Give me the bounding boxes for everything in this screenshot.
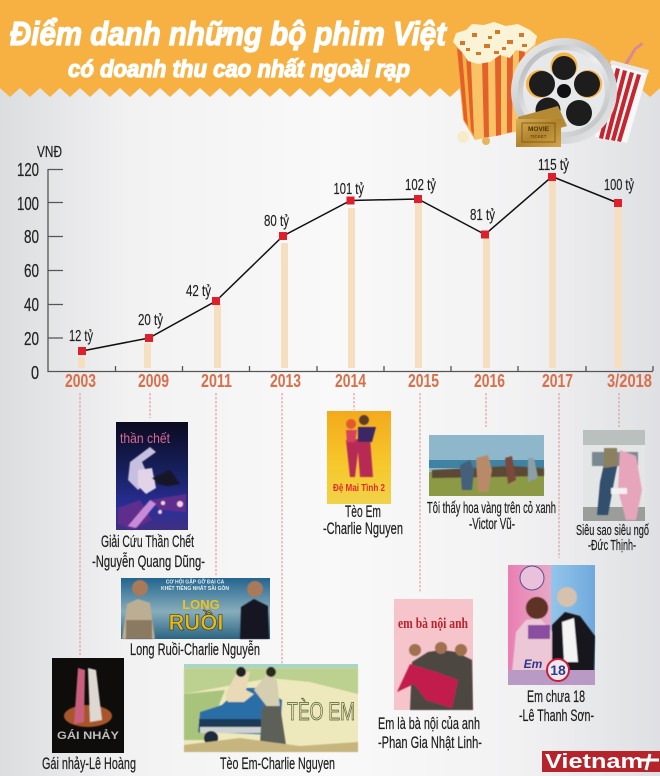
year labels xyxy=(65,371,652,391)
trend line xyxy=(82,176,618,351)
value labels: 102 tỷ xyxy=(405,177,436,194)
value labels xyxy=(69,157,634,345)
caption: Em là bà nội của anh xyxy=(378,715,482,752)
poster: Đệ Mai Tình: Đệ Mai Tình 2 xyxy=(333,483,385,494)
value labels: 81 tỷ xyxy=(470,207,495,224)
poster: Long Ruồi: RUỒI xyxy=(168,610,224,635)
y axis labels: 20 xyxy=(24,329,39,349)
year labels: 2016 xyxy=(474,371,505,391)
year labels: 2015 xyxy=(408,371,439,391)
poster: Tèo Em wide xyxy=(184,664,358,752)
year labels: 2003 xyxy=(65,371,96,391)
icon: film reel xyxy=(511,38,617,144)
y axis labels: 80 xyxy=(24,227,39,247)
y axis labels xyxy=(17,160,39,383)
header banner with zigzag edge xyxy=(0,0,660,97)
poster: Em chưa 18: Em xyxy=(524,657,543,671)
title: Điểm danh những bộ phim Việt xyxy=(10,15,448,52)
year labels: 2017 xyxy=(542,371,573,391)
poster: Long Ruồi: LONG xyxy=(182,597,220,612)
caption: Tèo Em: Tèo Em xyxy=(345,503,381,521)
caption: Em chưa 18: Em chưa 18 xyxy=(527,688,585,706)
poster: Long Ruồi: CƠ HỘI GẶP GỠ ĐẠI CA xyxy=(166,578,225,586)
y axis labels: 100 xyxy=(17,194,39,214)
poster: Em là bà nội của anh xyxy=(394,599,473,710)
axis unit label: VNĐ xyxy=(37,144,62,161)
caption: Em là bà nội của anh: Em là bà nội của anh xyxy=(378,715,480,733)
caption: Tôi thấy hoa vàng trên cỏ xanh: -Victor Vũ- xyxy=(469,516,515,533)
caption: Tèo Em xyxy=(323,503,403,538)
title xyxy=(10,15,448,83)
icon: drink cup xyxy=(595,42,649,143)
caption: Em là bà nội của anh: -Phan Gia Nhật Linh- xyxy=(378,734,482,752)
value labels: 100 tỷ xyxy=(604,177,634,194)
value labels: 101 tỷ xyxy=(334,181,364,198)
data points xyxy=(78,173,622,355)
caption: Long Ruồi: Long Ruồi-Charlie Nguyễn xyxy=(130,640,260,659)
caption: Giải Cứu Thần Chết xyxy=(92,533,205,571)
poster: Giải Cứu Thần Chết xyxy=(116,422,188,530)
value labels: 115 tỷ xyxy=(538,157,569,174)
caption: Tôi thấy hoa vàng trên cỏ xanh xyxy=(427,500,556,533)
value labels: 20 tỷ xyxy=(138,312,163,329)
poster: Đệ Mai Tình xyxy=(327,411,391,504)
poster: Long Ruồi: KHÉT TIẾNG NHẤT SÀI GÒN xyxy=(161,584,229,592)
value labels: 42 tỷ xyxy=(186,283,211,300)
poster: Siêu sao siêu ngố xyxy=(583,430,645,521)
y axis labels: 0 xyxy=(31,363,39,383)
year labels: 2014 xyxy=(335,371,366,391)
logo: Vietnam+ xyxy=(542,751,660,773)
poster: Gái nhảy: GÁI NHẢY xyxy=(57,729,120,742)
axes and ticks xyxy=(48,169,653,372)
poster: Em là bà nội của anh: em bà nội anh xyxy=(398,616,468,632)
y axis labels: 40 xyxy=(24,295,39,315)
icon: movie ticket: TICKET xyxy=(530,134,547,139)
value labels: 80 tỷ xyxy=(264,213,289,230)
poster: Em chưa 18 xyxy=(508,565,595,685)
caption: Siêu sao siêu ngố xyxy=(576,523,649,554)
title: có doanh thu cao nhất ngoài rạp xyxy=(68,56,410,83)
value labels: 12 tỷ xyxy=(69,328,93,345)
poster: Tèo Em wide: TÈO EM xyxy=(287,697,355,726)
poster: Gái nhảy xyxy=(52,658,124,753)
logo: Vietnam+: Vietnam xyxy=(545,751,643,773)
caption: Gái nhảy: Gái nhảy-Lê Hoàng xyxy=(42,755,136,773)
caption: Tôi thấy hoa vàng trên cỏ xanh: Tôi thấy hoa vàng trên cỏ xanh xyxy=(427,500,556,517)
poster: Long Ruồi xyxy=(121,578,270,639)
caption: Tèo Em: -Charlie Nguyen xyxy=(323,520,403,538)
year labels: 2009 xyxy=(138,371,169,391)
chart: revenue by year xyxy=(17,144,653,391)
caption: Giải Cứu Thần Chết: -Nguyễn Quang Dũng- xyxy=(92,552,205,571)
dashed connector lines xyxy=(80,393,619,664)
icon: movie ticket xyxy=(516,106,567,147)
icon: popcorn box xyxy=(453,22,537,145)
year labels: 2013 xyxy=(270,371,301,391)
poster: Em chưa 18: 18 xyxy=(550,662,566,678)
poster: Giải Cứu Thần Chết: thần chết xyxy=(120,430,170,446)
icon: movie ticket: MOVIE xyxy=(528,126,550,133)
year labels: 2011 xyxy=(201,371,232,391)
caption: Giải Cứu Thần Chết: Giải Cứu Thần Chết xyxy=(101,533,194,551)
value bars xyxy=(78,180,622,368)
caption: Em chưa 18 xyxy=(519,688,594,725)
y axis labels: 60 xyxy=(24,261,39,281)
y axis labels: 120 xyxy=(17,160,39,180)
poster: Tôi thấy hoa vàng trên cỏ xanh xyxy=(429,435,544,496)
caption: Tèo Em wide: Tèo Em-Charlie Nguyen xyxy=(220,755,335,773)
caption: Em chưa 18: -Lê Thanh Sơn- xyxy=(519,707,594,725)
